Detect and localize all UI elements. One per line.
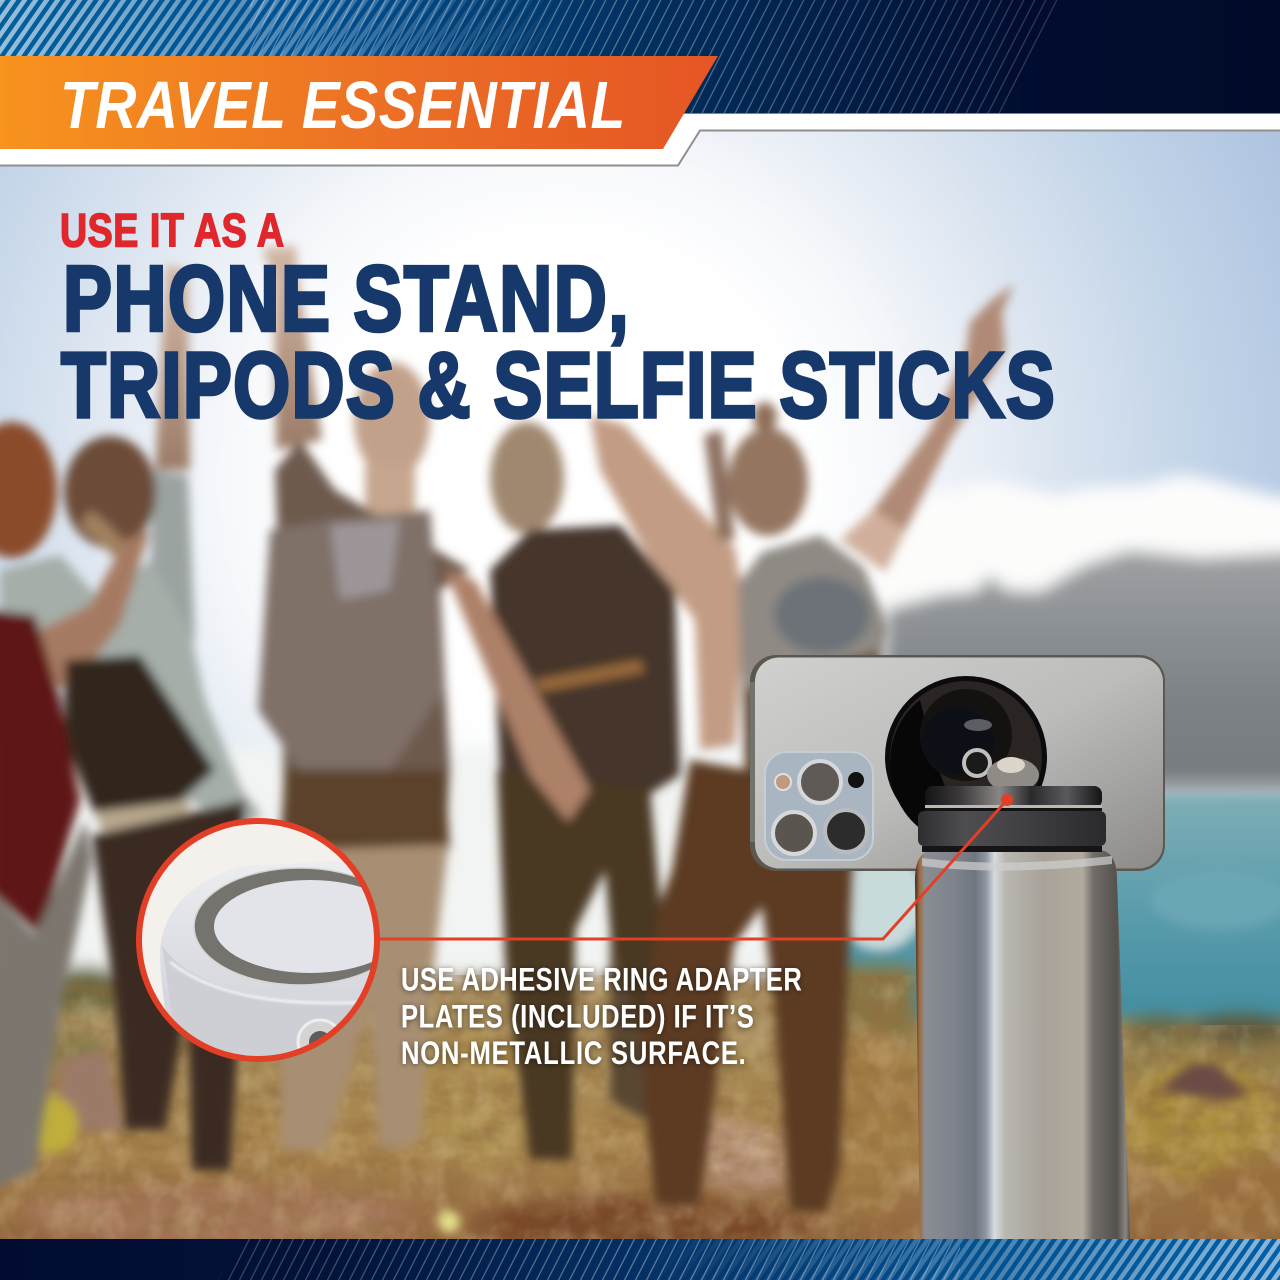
person 2 [155,265,190,470]
phone back [750,655,1165,871]
magnetic mount disc and ball [885,676,1047,838]
bottle cap [918,786,1106,852]
callout text: USE ADHESIVE RING ADAPTER [401,963,802,998]
callout: magnified adapter plate [136,818,380,1062]
callout text [401,963,802,1072]
callout text: NON-METALLIC SURFACE. [401,1036,746,1072]
headline line 1: PHONE STAND, [63,246,629,350]
headline line 2: TRIPODS & SELFIE STICKS [61,333,1055,437]
footer band with diagonal stripes [0,1239,1280,1280]
kicker: USE IT AS A [60,205,284,258]
camera bump [765,752,873,860]
product: steel bottle with phone on magnetic mount [750,655,1165,1239]
banner: orange parallelogram with title [0,56,718,149]
person 4 [490,422,564,534]
person 3 [262,246,322,450]
title: TRAVEL ESSENTIAL [60,69,625,143]
heading block [60,205,1055,437]
person 1 [0,422,57,558]
lens flare [438,1211,460,1233]
callout text: PLATES (INCLUDED) IF IT’S [401,1000,754,1035]
header band with diagonal stripes [0,0,1280,166]
person 5 [840,284,1014,572]
callout: leader line and dot [378,794,1013,939]
bottle body [915,850,1130,1239]
